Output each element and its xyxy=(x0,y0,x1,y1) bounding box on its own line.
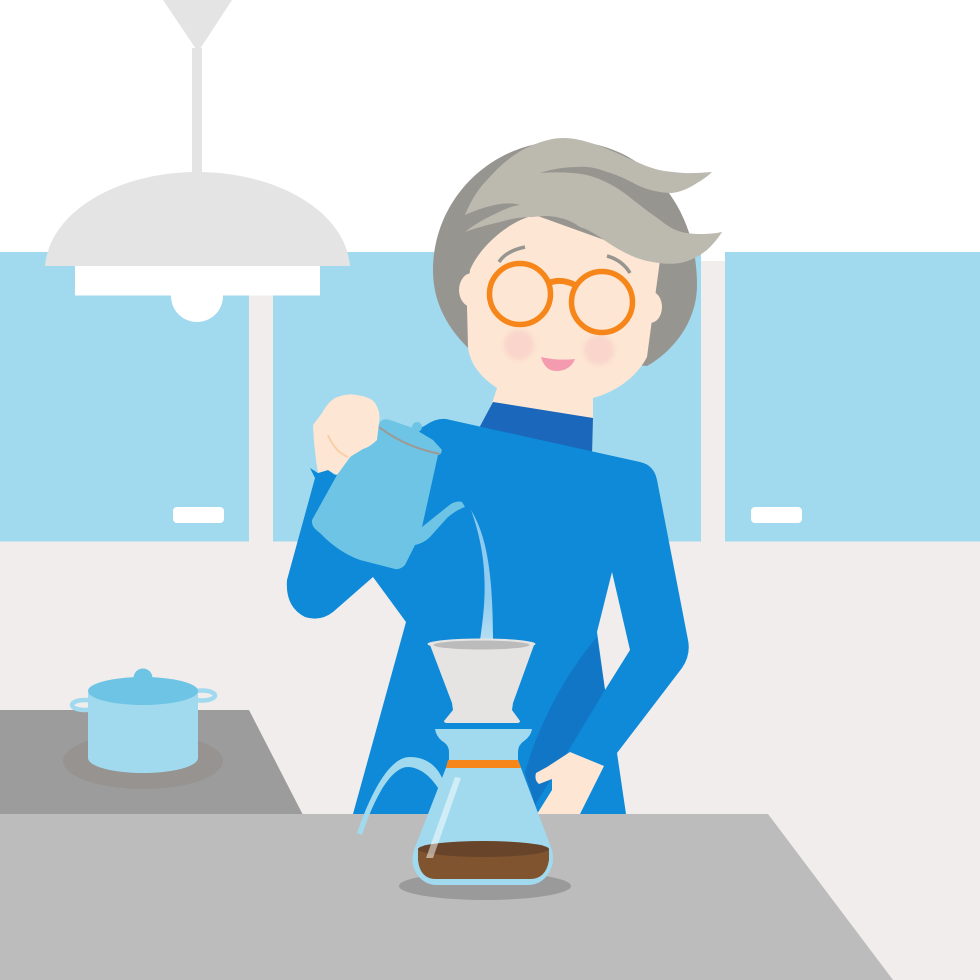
gap between arm and dress xyxy=(597,572,630,690)
wall cabinets xyxy=(0,252,980,542)
poured water stream xyxy=(471,510,493,640)
collar xyxy=(478,402,593,455)
stove top xyxy=(0,710,303,815)
kitchen counter xyxy=(0,814,893,980)
eyebrows xyxy=(499,247,630,273)
dress fold shadow xyxy=(525,637,605,805)
pendant lamp xyxy=(45,0,350,322)
carafe handle xyxy=(357,757,443,835)
hair front xyxy=(465,138,722,264)
kitchen wall xyxy=(0,541,980,980)
dripper xyxy=(428,638,536,723)
face and neck xyxy=(459,215,662,425)
right hand xyxy=(535,752,604,814)
kettle xyxy=(312,419,465,569)
hair back xyxy=(433,141,697,366)
body in blue dress xyxy=(287,419,689,814)
cheeks xyxy=(504,330,614,365)
carafe xyxy=(412,729,553,885)
cooking pot xyxy=(63,668,223,789)
left hand on kettle xyxy=(313,394,380,475)
glasses xyxy=(490,264,632,332)
mouth xyxy=(541,357,575,371)
carafe shadow xyxy=(399,872,571,900)
